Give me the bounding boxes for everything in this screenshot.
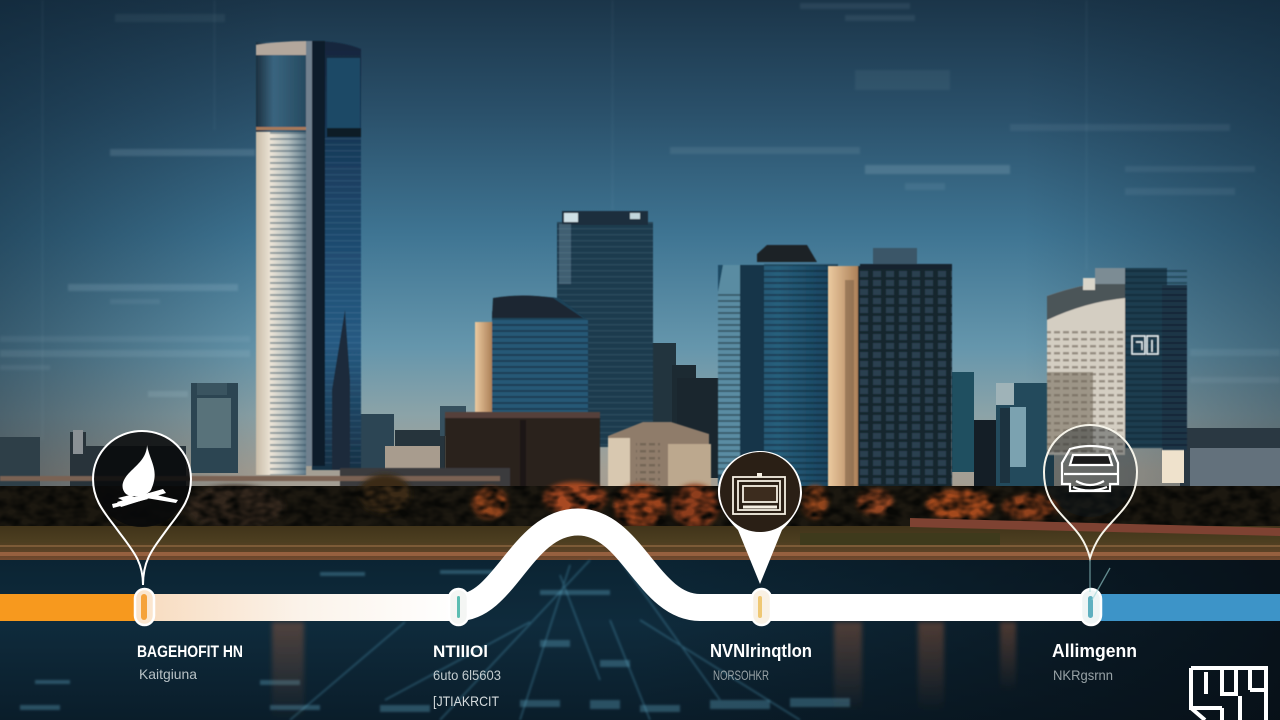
- logo mark: [1191, 668, 1266, 720]
- label 4 subtitle: NKRgsrnn: [1053, 667, 1113, 683]
- timeline bar: [0, 522, 1280, 621]
- label 2 line 1: 6uto 6l5603: [433, 667, 501, 683]
- building: peach and dark high-rise: [828, 248, 952, 498]
- label 1: [137, 642, 243, 682]
- blue end segment: [1098, 594, 1280, 621]
- building: blue glass high-rise: [718, 245, 838, 490]
- timeline node 2: [449, 589, 468, 625]
- road and water with light streaks: [0, 560, 1280, 720]
- skyline: background low-rise buildings: [0, 343, 1280, 496]
- white track segment: [146, 594, 458, 621]
- faint data overlay: [0, 0, 1280, 440]
- embankment: [0, 518, 1280, 560]
- label 4 title: Allimgenn: [1052, 641, 1137, 661]
- label 2: [433, 642, 501, 709]
- label 3: [710, 641, 812, 683]
- low-rise foreground buildings: [0, 412, 711, 502]
- pin 2: screen icon: [718, 451, 802, 584]
- timeline node 1: [135, 589, 154, 625]
- timeline node 3: [752, 589, 771, 625]
- label 4: [1052, 641, 1137, 683]
- label 3 subtitle: NORSOHKR: [713, 667, 769, 683]
- pin 1: flame icon: [93, 431, 191, 585]
- orange start segment: [0, 594, 138, 621]
- building: round blue block: [475, 296, 588, 420]
- icon: flame: [112, 445, 178, 508]
- curved white track with hump: [458, 522, 1092, 608]
- overlay glyph on tower: [1132, 336, 1158, 354]
- building: right cream tower: [1047, 268, 1187, 455]
- timeline node 4: [1081, 589, 1101, 625]
- label 1 title: BAGEHOFIT HN: [137, 642, 243, 661]
- sky background: [0, 0, 1280, 560]
- tall tower: [256, 41, 361, 475]
- building: centre tower: [557, 211, 653, 447]
- label 3 title: NVNIrinqtlon: [710, 641, 812, 661]
- label 1 subtitle: Kaitgiuna: [139, 666, 197, 682]
- label 2 line 2: [JTIAKRCIT: [433, 693, 499, 709]
- pin 3: vehicle icon: [1044, 425, 1137, 600]
- icon: vehicle: [1062, 446, 1118, 491]
- label 2 title: NTIlIOl: [433, 642, 488, 661]
- icon: screen: [733, 473, 785, 514]
- tree line: [0, 474, 1280, 530]
